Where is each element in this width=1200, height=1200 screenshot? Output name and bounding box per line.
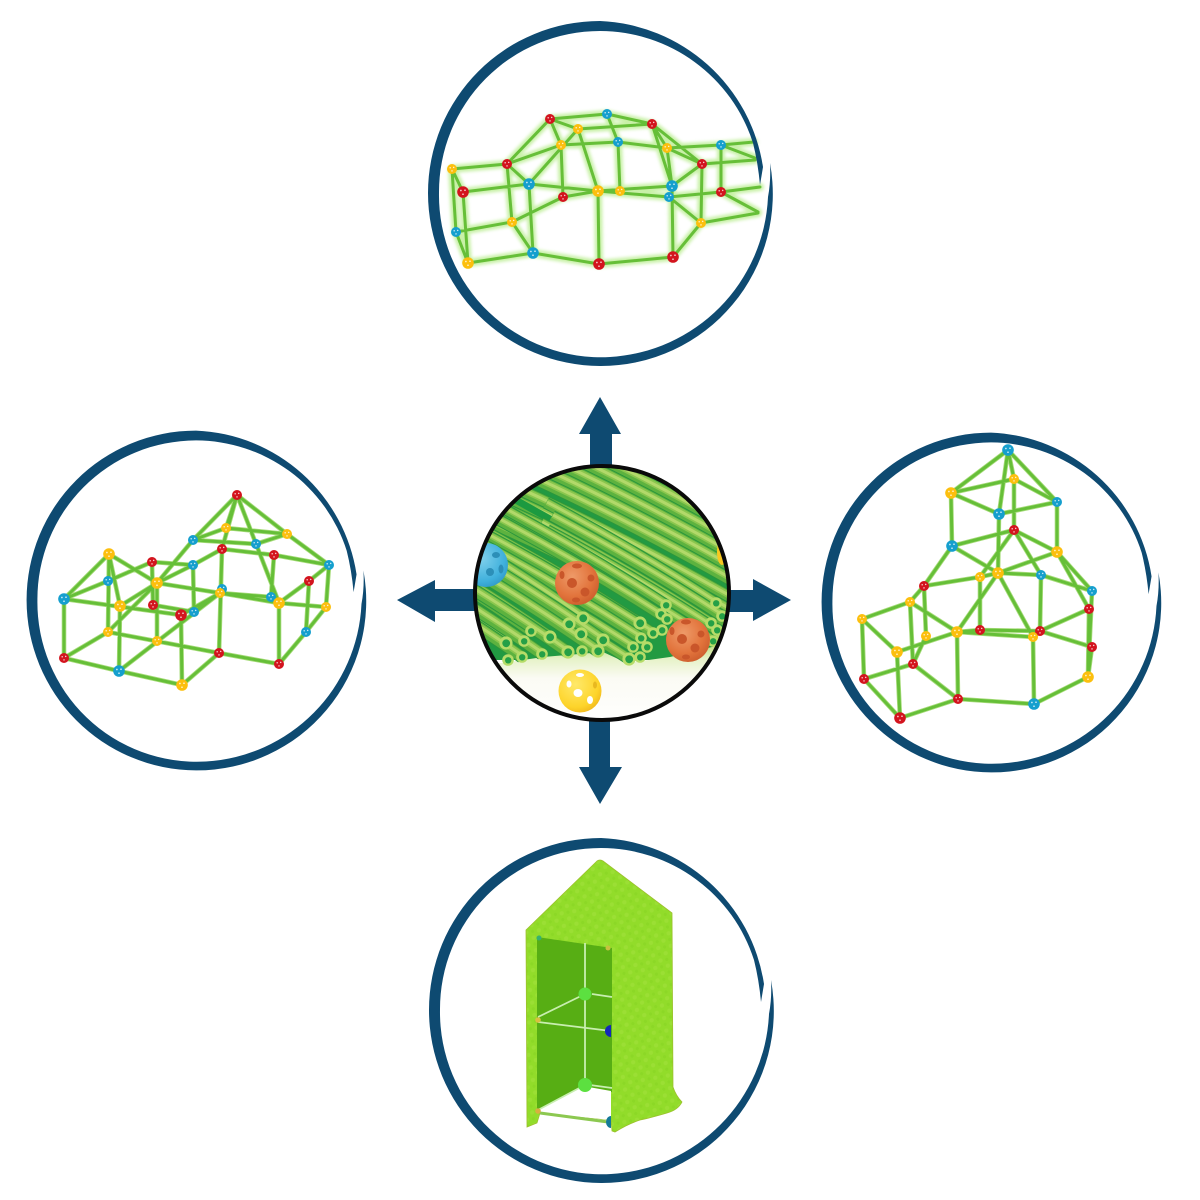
left rods (64, 495, 329, 685)
right rods (862, 450, 1092, 718)
panel: bottom tent (429, 838, 774, 1183)
tent door opening (537, 937, 612, 1110)
tent fabric (526, 860, 682, 1132)
panel: top structure (428, 21, 773, 366)
left connectors (58, 490, 334, 691)
arrow: down (579, 715, 622, 804)
arrow: right (725, 579, 791, 621)
rod ends (499, 597, 728, 666)
panel: left structure (27, 431, 366, 770)
arrow: up (579, 397, 621, 470)
ball: orange right (666, 618, 710, 662)
panel: centre circle with rods and connector balls (473, 464, 731, 722)
top ring (428, 21, 773, 366)
tent connectors (535, 936, 611, 1128)
ball: yellow edge (717, 546, 724, 565)
arrow: left (397, 580, 480, 622)
bottom ring (429, 838, 774, 1183)
ball: orange left (555, 561, 599, 605)
tent inner frame (538, 943, 612, 1122)
panel: right structure (822, 433, 1161, 772)
ball: yellow (558, 670, 602, 712)
right ring (822, 433, 1161, 772)
ball: blue (477, 543, 508, 587)
right connectors (857, 444, 1097, 724)
top rods (452, 114, 760, 264)
top connectors (447, 109, 726, 270)
centre circle outline (475, 466, 729, 720)
rod bundle (477, 468, 727, 690)
left ring (27, 431, 366, 770)
tent floor (539, 1086, 611, 1120)
